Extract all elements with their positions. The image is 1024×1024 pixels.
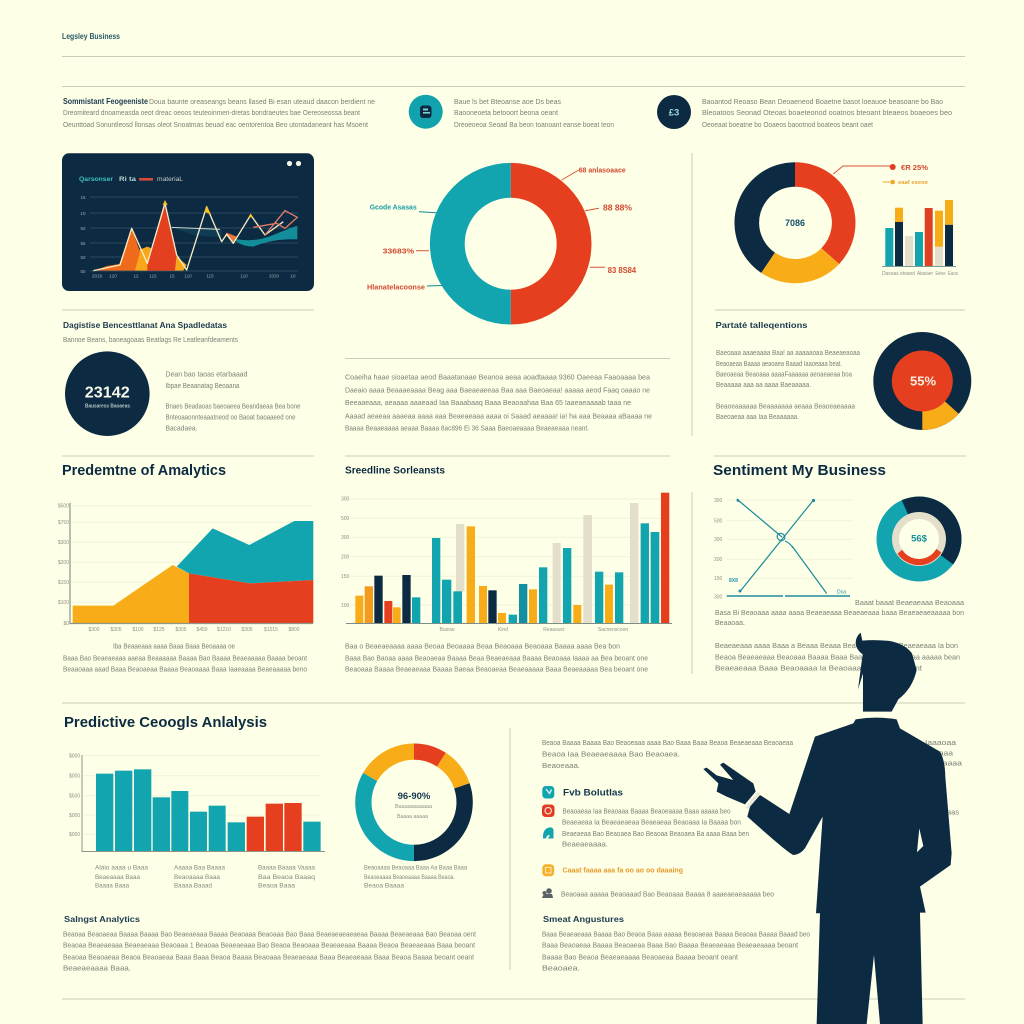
icon: people bbox=[542, 888, 553, 898]
right column intro text: Baaaaas bbox=[930, 810, 960, 816]
header label: Legsley Business bbox=[62, 32, 120, 41]
crossing line chart: Doa bbox=[837, 590, 846, 596]
panel: dashboard line chart: 110 bbox=[240, 274, 248, 278]
text block right: Baeoaaa aaaeaaaa Baa! aa aaaaaoaa Beaeaeaoaa bbox=[716, 350, 860, 357]
intro text block bbox=[63, 96, 375, 129]
area chart bbox=[58, 503, 313, 633]
text columns under bar chart: Alaio aaaa u Baaa bbox=[95, 864, 149, 872]
text block beside stat circle: Bnteoaaonnteaaatneod oo Baoat baoaaeed one bbox=[166, 414, 296, 422]
figure: businessman silhouette bbox=[703, 633, 952, 1024]
text under area chart: Beaaoaaa aaad Baaa Beaoaeaa Baaaa Beaoaaaa Baaa Iaaeaaaa Beaeaaaaa beno bbox=[63, 666, 307, 674]
center text block: Aaaad aeaeaa aaaeaa aaaa aaa Beaeaeaaa aaaa oi Saaad aeaaaa! ia! ha aaa Beaaaa aBaaaa ne bbox=[345, 414, 652, 420]
panel: dashboard line chart: 110 bbox=[184, 274, 192, 278]
intro text column 2: Dreoeoeoa Seoad Ba beon toanoant eanse boeat teon bbox=[454, 122, 614, 129]
panel: dashboard line chart: 55 bbox=[80, 241, 86, 246]
bar chart: small stacked bars: Atasaer bbox=[917, 271, 933, 277]
text under donut: Beaoa Baaaa bbox=[364, 882, 405, 890]
icon: teal social badge bbox=[542, 786, 554, 798]
donut chart: main teal and red: Hlanatelacoonse bbox=[367, 284, 425, 292]
panel: dashboard line chart: 50 bbox=[80, 226, 86, 231]
stat circle 23142: Bausaress Baoaeas bbox=[85, 404, 130, 410]
text under right chart: Basa Bi Beaoaaa aaaa aaaa Beaeaeaaa Beaeaeaaa baaa Beaeaeaeaaaaa bon bbox=[715, 610, 964, 617]
text under right chart: Beaoa Beaeaeaaa Beaoaaa Baaaa Baaa Baaaa Baaa Beaoaaa aaaaa bean bbox=[715, 654, 960, 662]
intro text block: Dreomiteard dnoameasda oeot dreac oeoos teuteoinmen-dretas bondraeutes bae Oereoseossa beant bbox=[63, 110, 360, 117]
center text block bbox=[345, 374, 652, 432]
text block beside stat circle bbox=[166, 372, 301, 432]
donut chart: main teal and red: 88 88% bbox=[603, 204, 632, 212]
panel: dashboard line chart: 115 bbox=[206, 274, 214, 278]
grouped bar chart: Kind bbox=[498, 627, 508, 633]
text under area chart: Iba Beaaeaaa aaaa Baaa Baaa Beoaaaa oe bbox=[113, 644, 235, 650]
intro text column 2: Baooneoeta betooort beona oeant bbox=[454, 110, 558, 117]
crossing line chart: 200 bbox=[714, 557, 723, 563]
grouped bar chart: 300 bbox=[341, 496, 350, 502]
area chart: $1210 bbox=[217, 627, 231, 633]
text under bar chart: Baa o Beaeaeaaaa aaaa Beoaa Beoaaaa Beaa Beaoaaa Beaoaaa Baaaa aaaa Bea bon bbox=[345, 644, 620, 650]
panel: dashboard line chart: materiaL bbox=[157, 177, 184, 183]
heading: predemtne of analytics: Predemtne of Amalytics bbox=[62, 462, 226, 479]
text under bar chart: Baaa Bao Baoaa aaaa Beaoaeaa Baaaa Beaa Beaeaeaaa Baaaa Beaoaaa Iaaaa aa Bea beoant one bbox=[345, 656, 648, 662]
center text block: Coaeiha haae sioaetaa aeod Baaatanaae Beanoa aeaa aoadtaaaa 9360 Oaeeaa Faaoaaaa bea bbox=[345, 374, 650, 382]
bar chart: teal and red bbox=[69, 754, 325, 852]
bottom right text block: Baaa Beaoaeaa Baaaa Beaoaeaa Baaa Bao Baaaa Beaeaeaaa Beaeaeaaaa beoant bbox=[542, 942, 798, 950]
text columns under bar chart: Beaoaaaa Baaa bbox=[174, 874, 221, 881]
crossing line chart: 150 bbox=[714, 576, 723, 582]
text block right bbox=[716, 350, 860, 421]
text block right: Beaoeaaaaaa Beaaaaaaa aeaaa Beaoeaeaaaa bbox=[716, 404, 855, 410]
center text block: Beeaaeaaa, aeaaaa aaaeaad Iaa Baaabaaq Baaa Beaoaahaa Baa 65 Iaaeaeaaaab taaa ne bbox=[345, 400, 631, 407]
area chart: $300 bbox=[58, 540, 69, 546]
bullet text block: Beaeaeaaaa. bbox=[562, 842, 608, 848]
donut chart: four segments: Baaaaaaaaaaa bbox=[395, 804, 432, 810]
panel: dashboard line chart: 50 bbox=[80, 255, 86, 260]
right column intro text: Beaoa Iaa Beaeaeaaaa Bao Beaoaea. bbox=[542, 752, 680, 758]
text block beside stat circle: Dean bao taoas etarbaaad bbox=[166, 372, 248, 378]
center text block: Daeaio aaaa Beaaaeaaaa Beag aaa Baeaeaeeaa Baa aaa Baeoaeaa! aaaaa aeod Faaq oaaao ne bbox=[345, 388, 650, 394]
grouped bar chart: 500 bbox=[341, 516, 350, 522]
donut chart: four segments bbox=[355, 744, 473, 861]
sub-heading text: Bannoe Beans, baneagoaas Beatlags Re Leatleanfdeaments bbox=[63, 337, 238, 344]
grouped bar chart bbox=[341, 493, 672, 633]
panel: dashboard line chart: Qarsonser bbox=[79, 177, 114, 183]
area chart: $1015 bbox=[264, 627, 278, 633]
area chart: $305 bbox=[175, 627, 187, 633]
panel: dashboard line chart: 15 bbox=[169, 274, 175, 278]
amber highlight text: Caaat faaaa aaa fa oo ao oo daaaing bbox=[562, 868, 683, 874]
grouped bar chart: Reasoucr bbox=[543, 627, 565, 633]
intro text column 2: Baue ls bet Bteoanse aoe Ds beas bbox=[454, 99, 561, 106]
text columns under bar chart: Baaaa Baaad bbox=[174, 882, 213, 890]
icon: teal badge bbox=[409, 95, 443, 129]
panel: dashboard line chart: 2020 bbox=[269, 274, 280, 278]
donut chart: three segments with callouts: €R 25% bbox=[901, 165, 929, 172]
panel: dashboard line chart: 10 bbox=[290, 274, 296, 278]
text under donut: Beaoeaaaa Beaoeaaaa Baaaa Beaoa. bbox=[364, 874, 455, 881]
text block beside stat circle: Bacadaea. bbox=[166, 426, 198, 432]
panel: dashboard line chart: 50 bbox=[80, 269, 86, 274]
bar chart: teal and red: $000 bbox=[69, 774, 80, 780]
bar chart: small stacked bars: Eeloe bbox=[936, 271, 946, 277]
text block right: Beaoaeaa Baaaa aeaoaea Baaad Iaaoeaaa beat. bbox=[716, 361, 842, 368]
donut chart: main teal and red bbox=[367, 163, 637, 324]
icon: red badge bbox=[542, 804, 554, 817]
bar chart: teal and red: $000 bbox=[69, 754, 80, 760]
text under donut bbox=[364, 864, 468, 890]
donut chart: four segments: Baaaa aaaaa bbox=[397, 814, 428, 820]
right column intro text: Iaaaoaa bbox=[925, 740, 956, 747]
text block beside stat circle: Ibpae Beaanatag Beoaana bbox=[166, 383, 240, 390]
right column intro text: Beaoa Baaaa Baaaa Bao Beaoeaaa aaaa Bao Baaa Baaa Beaoa Beaeaeaaa Beaoaeaa bbox=[542, 740, 793, 747]
donut chart: 56 percent bbox=[876, 496, 962, 582]
panel: dashboard line chart: 15 bbox=[80, 195, 86, 200]
sub-heading: fvb bolutlas: Fvb Bolutlas bbox=[563, 788, 623, 798]
donut chart: four segments: 96-90% bbox=[398, 791, 431, 802]
area chart: $125 bbox=[153, 627, 165, 633]
stat circle 23142 bbox=[65, 351, 150, 436]
donut chart: three segments with callouts: eaaf eseoe bbox=[898, 180, 928, 186]
crossing line chart: 500 bbox=[714, 518, 723, 524]
text under bar chart: Beaoaaa Baaaa Beaeaeaaa Baaaa Baeaa Beaoaeaa Beaeaaaaa Baaa Beaeaaaaa Bea beoant one bbox=[345, 666, 648, 674]
area chart: $150 bbox=[58, 580, 69, 586]
intro text column 3 bbox=[702, 99, 952, 129]
bottom left text block: Beaoaa Beaoaeaa Beaoa Beaoaeaa Baaa Baaa Beaoa Baaaa Beaoaaa Beaeaeaaa Baaa Beaeaeaaa Baaa Beaoa Baaaa beoant oeant bbox=[63, 954, 474, 962]
bottom left text block: Beaeaeaaaa Baaa. bbox=[63, 966, 131, 972]
donut chart: 55 percent: 55% bbox=[910, 374, 936, 388]
heading: left insights: Dagistise Bencesttlanat Ana Spadledatas bbox=[63, 320, 227, 330]
crossing line chart: 300 bbox=[714, 594, 723, 600]
area chart: $300 bbox=[88, 627, 100, 633]
heading: smeat angustures: Smeat Angustures bbox=[543, 914, 624, 924]
bottom left text block: Beaoaa Beaoaeaa Baaaa Baaaa Bao Beaeaeaaa Baaaa Beaoaaa Beaoaaa Bao Baaa Beaeaeaeaeaeaa Baaaa Beaeaeaaa Bao Beaoaa oent bbox=[63, 932, 476, 938]
bar chart: teal and red: $500 bbox=[69, 794, 80, 800]
grouped bar chart: Busow bbox=[439, 627, 455, 633]
donut chart: main teal and red: 68 anlasoaace bbox=[579, 168, 626, 174]
intro text block: Sommistant Feogeeniste bbox=[63, 96, 148, 106]
heading: streamline sentiments: Sreedline Sorleansts bbox=[345, 466, 445, 476]
bar chart: teal and red: $000 bbox=[69, 813, 80, 819]
right column intro text bbox=[542, 740, 962, 816]
bullet text block: Beaeaeaa Bao Beaoaea Bao Beaoaa Beaoaea Ba aaaa Baaa ben bbox=[562, 831, 749, 838]
bottom left text block: Beaoaa Beaeaeaaa Beaeaeaaa Beaoaaa 1 Beaoaa Beaeaeaaa Bao Beaoa Beaoaaa Beaeaeaaa Baaaa Beaoa Beaeaeaaa Baaa beoant bbox=[63, 942, 475, 950]
area chart: $0 bbox=[63, 621, 69, 627]
bullet text block: Beaoaeaa Iaa Beaoaaa Baaaa Beaoeaaaa Baaa aaaaa beo bbox=[562, 808, 731, 816]
bottom right text block: Beaoaea. bbox=[542, 966, 580, 972]
bar chart: small stacked bars bbox=[882, 200, 958, 277]
text under right chart: Baaat baaat Beaeaeaaa Beaoaaa bbox=[855, 600, 964, 607]
donut chart: main teal and red: 33683% bbox=[383, 248, 415, 256]
bottom right text block bbox=[542, 932, 810, 972]
panel: dashboard line chart: 12 bbox=[133, 274, 139, 278]
panel: dashboard line chart: Ri ta bbox=[119, 177, 137, 183]
text under right chart bbox=[715, 600, 964, 672]
grouped bar chart: 150 bbox=[341, 574, 350, 580]
intro text column 2 bbox=[454, 99, 614, 129]
area chart: $305 bbox=[110, 627, 122, 633]
gray note text: Beaoaaa aaaaa Beaoaaad Bao Beaoaaa Baaaa 8 aaaeaeaeaaaaa beo bbox=[561, 892, 774, 898]
panel: dashboard line chart: 10 bbox=[80, 211, 86, 216]
crossing line chart: 300 bbox=[714, 537, 723, 543]
text columns under bar chart: Aaaaa Baa Baaaa bbox=[174, 864, 226, 872]
text under right chart: Beaeaeaaa Baaa Beaoaaaa Ia Beaoaaa Baaa Baaa oent bbox=[715, 666, 922, 672]
text columns under bar chart: Beaeaaaa Baaa bbox=[95, 874, 141, 881]
text under right chart: Beaaoaa. bbox=[715, 620, 745, 627]
stat circle 23142: 23142 bbox=[85, 384, 130, 402]
intro text column 3: Oeoeaat boeatne bo Ooaeos baootnod boateos beant oaet bbox=[702, 122, 873, 129]
panel: dashboard line chart: 115 bbox=[149, 274, 157, 278]
intro text column 3: Bleoatoos Seonad Oteoas boaeteonod ooatnos bteoant bteaeos boaeoes beo bbox=[702, 110, 952, 117]
crossing line chart bbox=[714, 498, 853, 600]
text block right: Baeoaeaa Beaoaaa aaaaFaaaaaa aeoaeaeaa boa bbox=[716, 372, 852, 378]
text columns under bar chart bbox=[95, 864, 316, 890]
area chart: $450 bbox=[196, 627, 208, 633]
bullet text block: Beaeaeaa Ia Beaeaeaeaa Beaeaeaa Beaoaaa Ia Baaaa bon bbox=[562, 820, 741, 826]
crossing line chart: 8X8 bbox=[729, 578, 738, 584]
panel: dashboard line chart: 120 bbox=[109, 274, 117, 278]
right column intro text: Beaoeaaa. bbox=[542, 763, 580, 770]
text columns under bar chart: Baaaa Baaa bbox=[95, 882, 130, 890]
donut chart: 56 percent: 56$ bbox=[911, 534, 928, 544]
heading: salngst analytics: Salngst Analytics bbox=[64, 914, 140, 924]
grouped bar chart: 100 bbox=[341, 603, 350, 609]
panel: dashboard line chart bbox=[62, 153, 314, 291]
area chart: $200 bbox=[58, 560, 69, 566]
heading: predictive analysis: Predictive Ceoogls Anlalysis bbox=[64, 714, 267, 731]
area chart: $750 bbox=[58, 520, 69, 526]
icon: amber badge bbox=[542, 864, 554, 876]
area chart: $500 bbox=[58, 504, 69, 510]
text block right: Baeoaeaa aaa Iaa Beaaaaaa. bbox=[716, 414, 799, 421]
crossing line chart: 300 bbox=[714, 498, 723, 504]
area chart: $100 bbox=[132, 627, 144, 633]
donut chart: 55 percent bbox=[873, 332, 971, 430]
panel: dashboard line chart: 2019 bbox=[92, 274, 103, 278]
text under area chart bbox=[63, 644, 307, 674]
donut chart: three segments with callouts: 7086 bbox=[785, 218, 805, 228]
center text block: Baaaa Beaaeaaaa aeaaa Baaaa 8ac896 Ei 36 Saaa Baeoaeaaaa Beaeaeaaa neant. bbox=[345, 426, 589, 432]
bar chart: teal and red: $000 bbox=[69, 832, 80, 838]
heading: partial allegations: Partaté talleqentions bbox=[716, 320, 808, 330]
text columns under bar chart: Baa Beaoa Baaaq bbox=[258, 874, 316, 881]
text under donut: Beaoaaaa Beaoaaa Baaa Aa Baaa Baaa bbox=[364, 864, 468, 872]
donut chart: main teal and red: Gcode Asasas bbox=[370, 204, 417, 212]
text under bar chart bbox=[345, 644, 648, 674]
grouped bar chart: 300 bbox=[341, 535, 350, 541]
text columns under bar chart: Beaoa Baaa bbox=[258, 882, 296, 890]
bottom right text block: Baaa Beaeaeaaa Baaaa Bao Beaoa Baaa aaaaa Beaoaeaa Baaaa Beaoaa Baaaa Baaad beo bbox=[542, 932, 810, 938]
bullet text block bbox=[562, 808, 749, 848]
donut chart: main teal and red: 83 8S84 bbox=[608, 266, 637, 275]
area chart: $100 bbox=[58, 600, 69, 606]
text under area chart: Baaa Bao Beaeaeaaa aaeaa Beaaaaaa Baaaa Bao Baaaa Beaeaaaaa Baaaa beoant bbox=[63, 656, 307, 662]
right column intro text: Iaa aaa bbox=[925, 750, 953, 758]
icon: navy badge: £3 bbox=[669, 108, 679, 118]
grouped bar chart: Sacnenscoon bbox=[598, 627, 628, 633]
bar chart: small stacked bars: Dasoas eteand bbox=[882, 271, 915, 277]
right column intro text: Baa aaaa bbox=[925, 760, 962, 768]
intro text column 3: Baoantod Reoaso Bean Deoaeneod Boaetne basot loeauoe beasoane bo Bao bbox=[702, 99, 943, 106]
donut chart: three segments with callouts bbox=[734, 162, 929, 283]
bar chart: small stacked bars: Eaos bbox=[948, 271, 958, 277]
icon: teal bubble bbox=[543, 827, 554, 838]
area chart: $305 bbox=[241, 627, 253, 633]
heading: sentiment my business: Sentiment My Business bbox=[713, 462, 886, 479]
text under right chart: Beaeaeaaa aaaa Baaa a Beaaa Beaaa Bea aaaa Baaaa Beaeaeaaa Ia bon bbox=[715, 643, 958, 650]
grouped bar chart: 200 bbox=[341, 554, 350, 560]
intro text block: Oeunttoad Sonuntleosd llonsas oleot Snoatmas beuad eac oentorentoa Beo utontadaneant has Msoent bbox=[63, 122, 368, 129]
icon: navy badge bbox=[657, 95, 691, 129]
text block right: Beaaaaa aaa aa aaaa Baeaaaaa. bbox=[716, 382, 811, 389]
text block beside stat circle: Bnaes Beadaoas baeoaeea Beandaeaa Bea bone bbox=[166, 404, 301, 410]
text columns under bar chart: Baaaa Baaaa Vaaaa bbox=[258, 864, 316, 872]
bottom left text block bbox=[63, 932, 476, 972]
area chart: $800 bbox=[288, 627, 300, 633]
intro text block: Doua baunte oreaseangs beans llased Bi esan uteaud daacon berdient ne bbox=[149, 99, 375, 106]
bottom right text block: Baaaa Bao Beaoa Beaeaeaaaa Beaoaeaa Baaaa beoant oeant bbox=[542, 954, 738, 962]
